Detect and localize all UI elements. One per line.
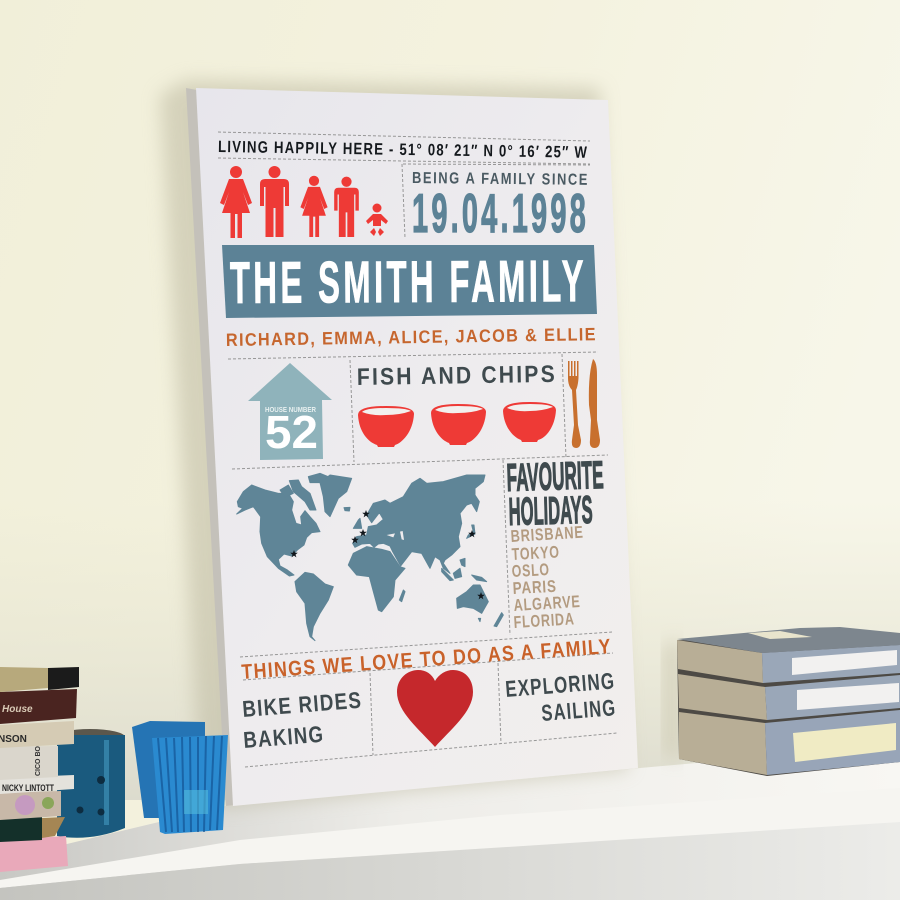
photo props: left book stack [0,667,79,872]
front glass [152,735,228,834]
shelf [0,745,900,900]
book 7 green [0,817,65,842]
icon: baby [366,204,388,236]
map star: Brisbane [477,592,485,599]
holiday list: FLORIDA [513,609,575,632]
favourite holidays heading [506,454,604,534]
coordinates strip [218,132,590,164]
canvas shadow [160,80,628,808]
book 5 white [0,775,74,794]
canvas print [186,88,638,806]
favourite food heading: FISH AND CHIPS [357,361,557,391]
book gaps [677,640,900,776]
book 5 white: NICKY LINTOTT [2,783,54,794]
coordinates strip: LIVING HAPPILY HERE - 51° 08′ 21″ N 0° 16′ 25″ W [218,138,588,162]
family names: RICHARD, EMMA, ALICE, JACOB & ELLIE [226,324,597,350]
family figures [220,166,388,238]
icon: woman [220,166,252,238]
map star: Florida [290,550,298,557]
map star: Tokyo [468,530,476,537]
activities heading: THINGS WE LOVE TO DO AS A FAMILY [241,635,612,684]
book 6 floral [0,791,61,820]
books shadow [664,640,680,760]
book 4 grey white [0,731,58,780]
section dividers [228,352,608,469]
holiday list: PARIS [512,577,557,598]
bottom book [679,710,900,775]
icon: man [260,166,289,237]
book 3 cream [0,721,74,748]
canvas side edge [186,88,235,806]
book 1 khaki black [0,667,79,692]
icon: knife [589,359,600,448]
icon: girl [300,176,328,237]
activities right [504,667,617,726]
back glass [132,721,205,818]
world map [237,473,503,641]
activities left: BIKE RIDES [241,687,363,722]
icon: house number: 52 [265,406,318,458]
middle book [678,674,900,720]
blue pot [55,729,125,838]
icon: fork [568,361,581,448]
icon: bowl [358,406,414,447]
holiday list: TOKYO [511,543,560,564]
map star: Oslo [362,510,370,517]
activities right: EXPLORING [504,667,616,702]
book 2 maroon [0,689,77,724]
book 2 maroon: House [2,704,33,715]
icon: bowl [431,404,486,445]
holiday list: BRISBANE [510,523,584,546]
photo props: blue glasses and pot [55,721,228,838]
photo props: right book stack [677,627,900,776]
canvas print: FAVOURITE [506,454,604,500]
map star: Algarve [351,536,359,543]
top book [677,627,900,683]
activities dividers [245,663,617,767]
activities left [241,687,363,753]
map star: Paris [359,529,367,536]
title banner: THE SMITH FAMILY [230,248,587,316]
icon: bowl [503,402,556,442]
book 8 pink [0,836,68,872]
icon: house number [248,363,332,460]
book 4 grey white: CICO BOOKS [35,731,42,776]
holiday list: ALGARVE [513,592,581,615]
canvas print: HOLIDAYS [508,489,593,534]
holidays divider [503,460,510,635]
date block: 19.04.1998 [412,182,589,244]
icon: house number: HOUSE NUMBER [265,405,316,414]
icon: boy [334,177,359,237]
activities left: BAKING [242,721,325,753]
date block: BEING A FAMILY SINCE [412,170,589,189]
icon: heart [397,670,473,747]
date block [402,164,590,244]
holiday list: OSLO [511,560,550,581]
activities right: SAILING [540,694,617,726]
title banner [222,245,597,318]
canvas face [196,88,638,806]
holiday list [510,523,584,632]
